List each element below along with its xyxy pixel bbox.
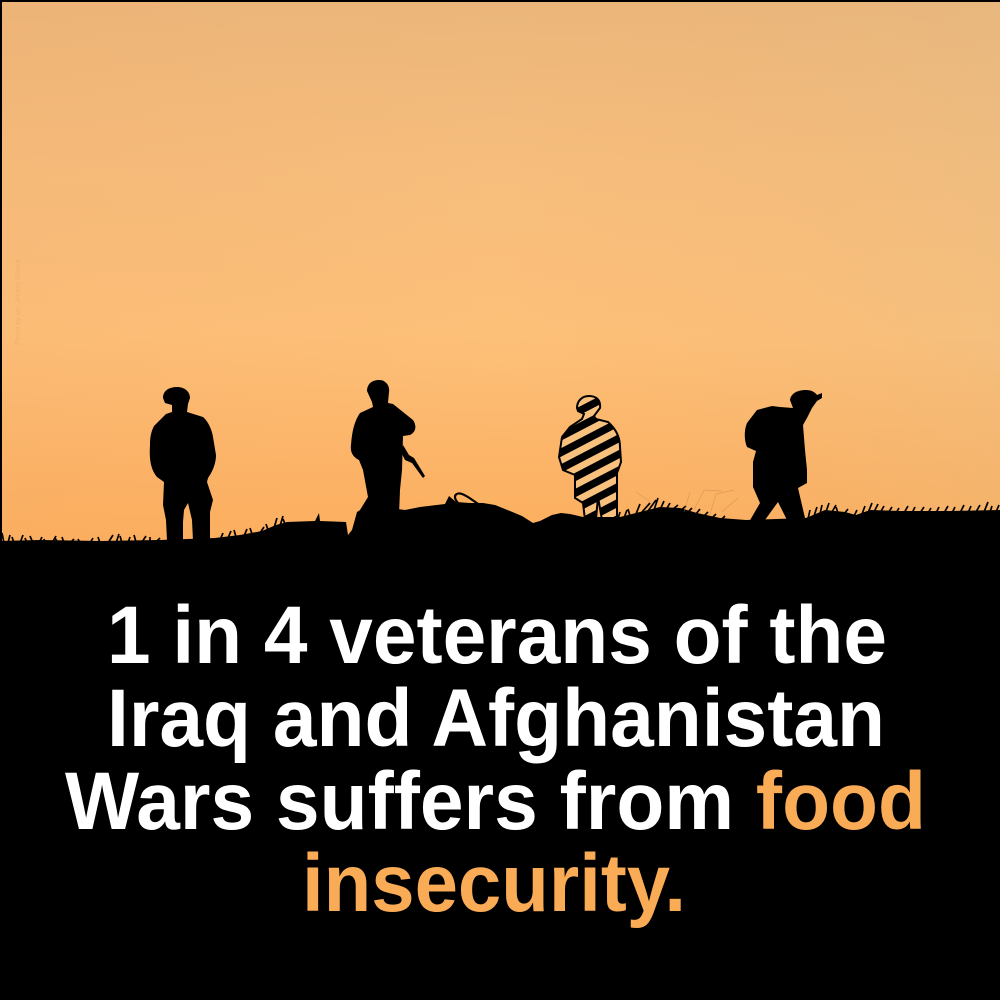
headline line 3: Wars suffers from food: [65, 756, 926, 847]
soldier silhouette: striped, highlighted veteran: [558, 395, 622, 517]
headline line 1: 1 in 4 veterans of the: [107, 590, 887, 681]
ground and gear silhouette: [0, 496, 1000, 1000]
headline: [65, 590, 926, 929]
soldier silhouette: right, walking with pack: [745, 390, 822, 522]
headline line 2: Iraq and Afghanistan: [107, 673, 885, 764]
headline line 4: insecurity.: [302, 838, 686, 929]
soldier silhouette: left, standing: [150, 387, 216, 541]
photo credit: Photo by Mr. Johnny Bivera: [15, 259, 22, 345]
grass blades along the hill: [2, 498, 999, 543]
faint dry branches behind the hill: [636, 490, 738, 514]
background: sunset sky: [0, 0, 1000, 560]
gear loop on the pile: [455, 493, 480, 505]
soldier silhouette: second, with rifle: [351, 380, 425, 525]
